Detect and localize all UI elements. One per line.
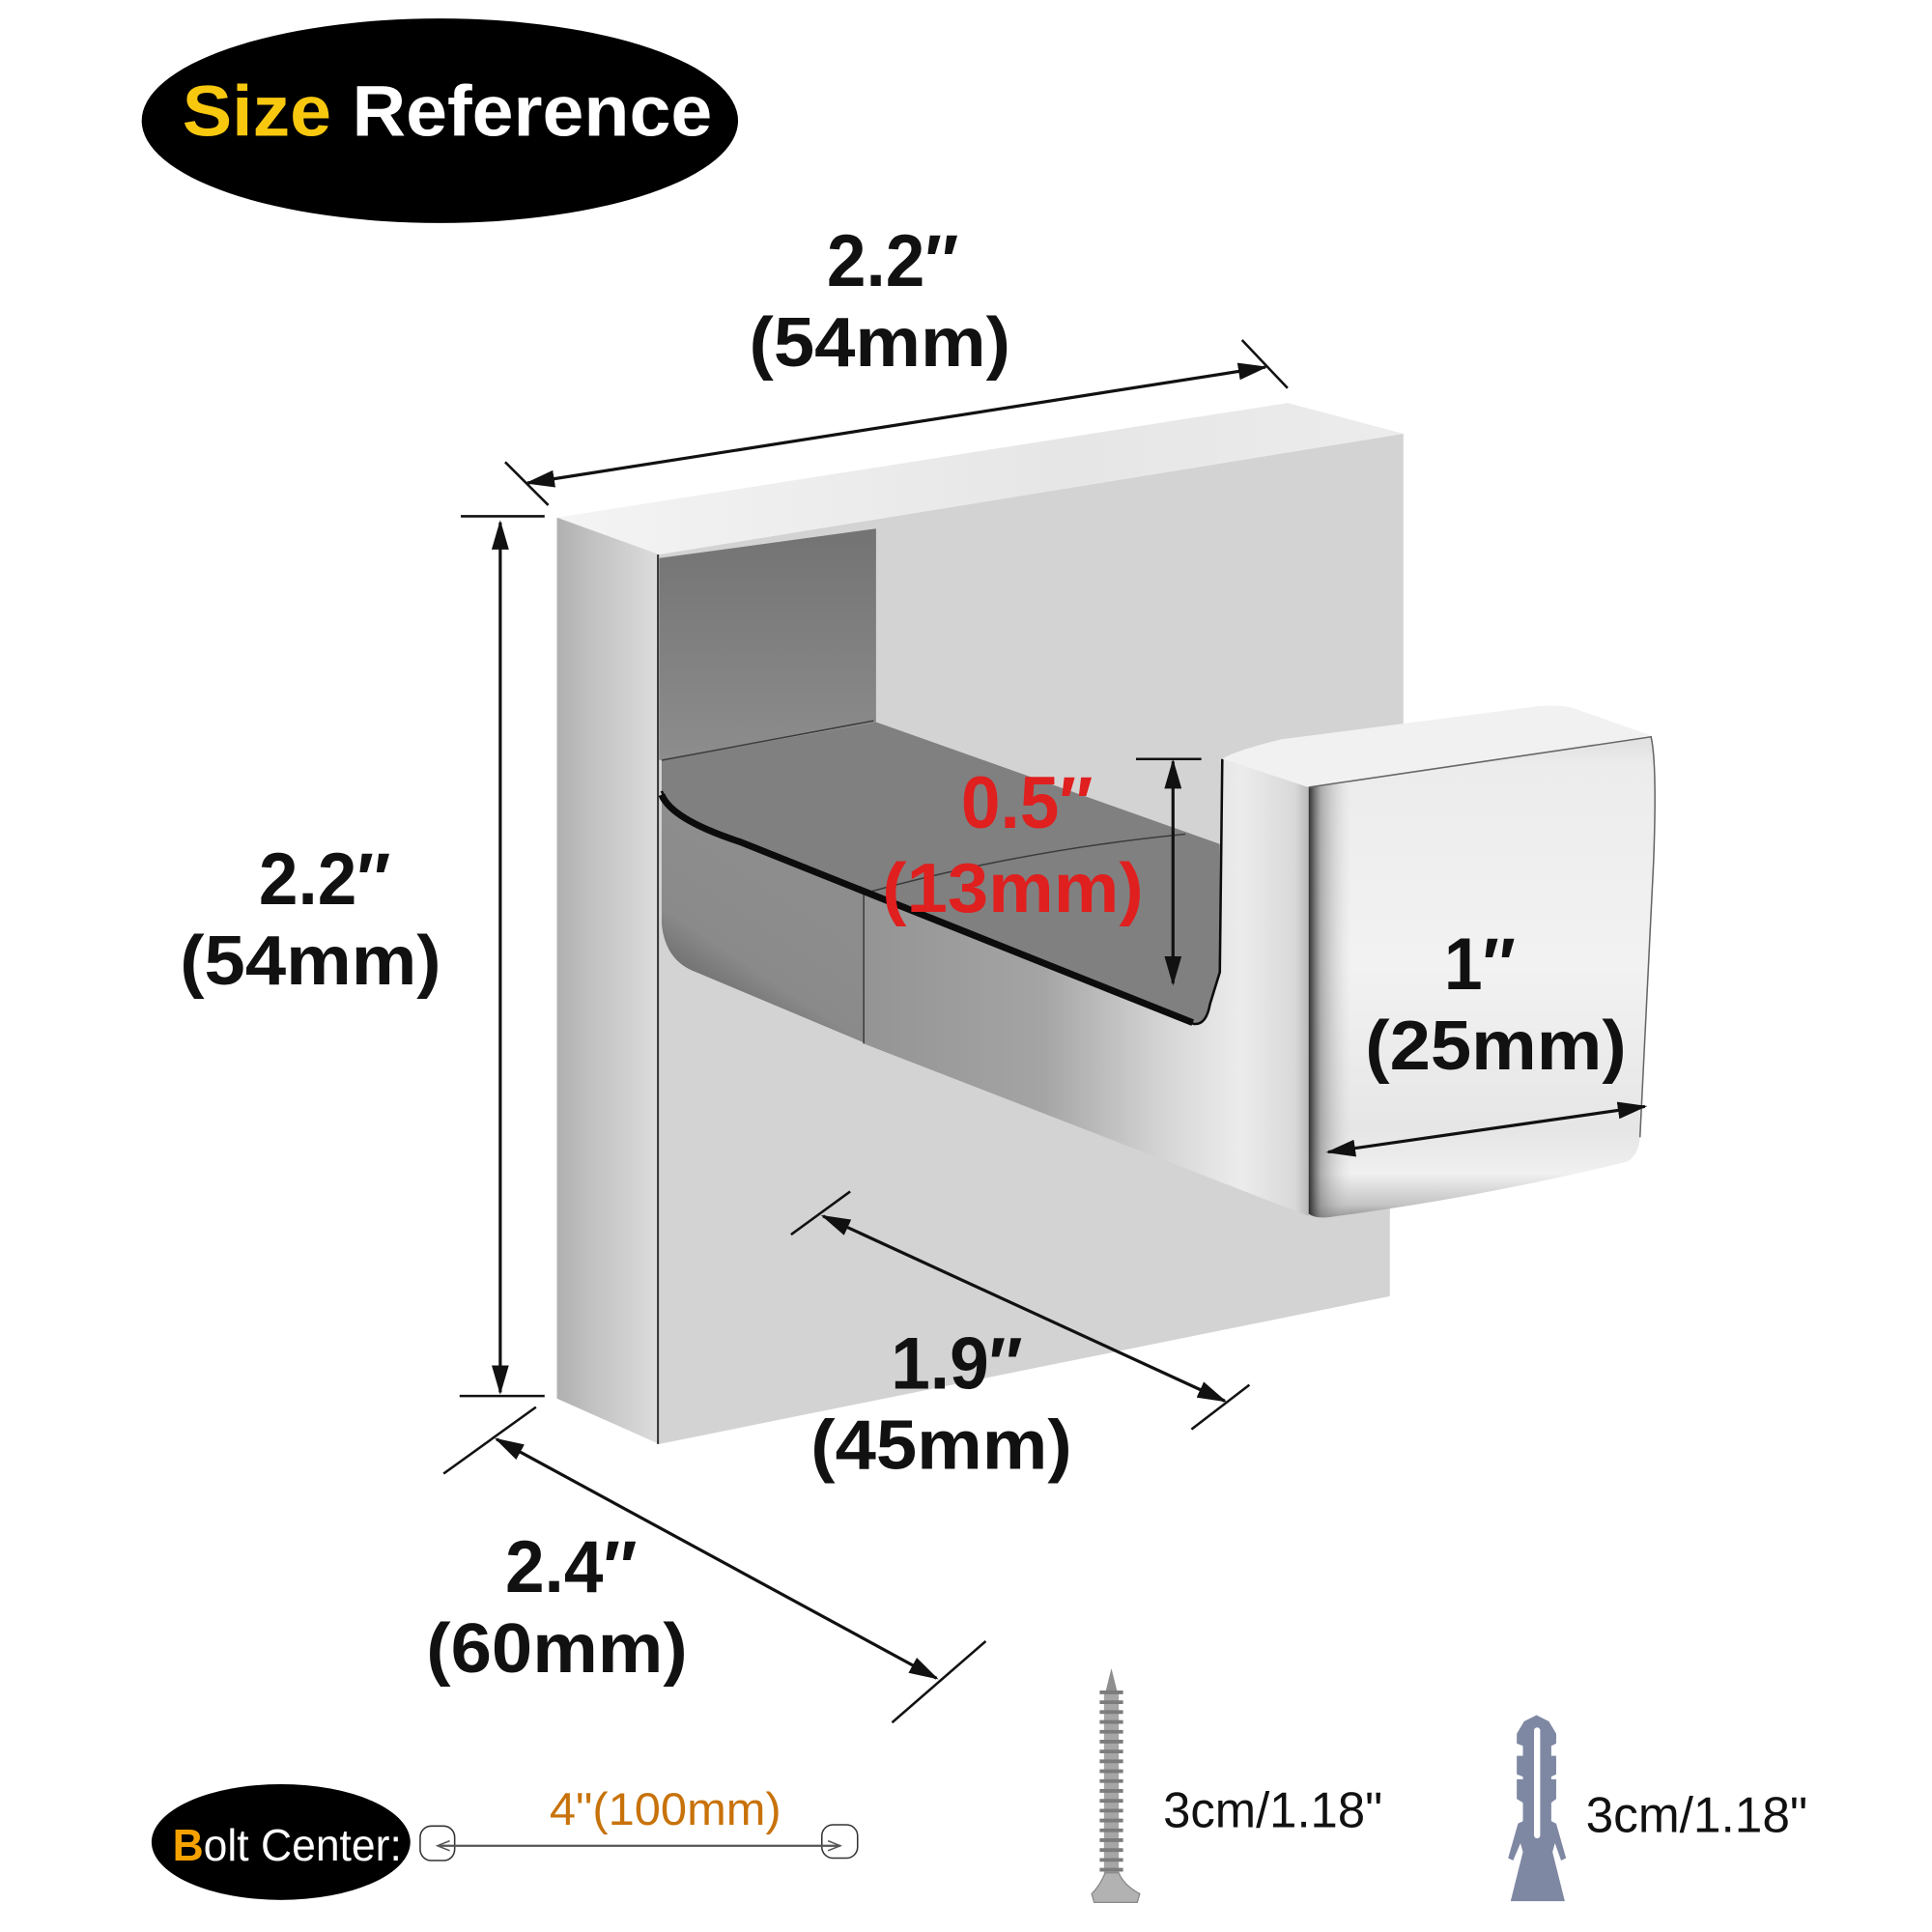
dimension: top width	[505, 220, 1288, 505]
dimension: head width: (25mm)	[1365, 1007, 1627, 1085]
dimension: head width: 1″	[1444, 923, 1516, 1006]
plate top face	[557, 403, 1404, 554]
dimension: top width: 2.2″	[827, 220, 958, 302]
bolt center measurement	[420, 1784, 858, 1861]
arm seams	[662, 721, 1185, 1043]
dimension: height	[180, 516, 545, 1396]
dimension: arm length: (45mm)	[810, 1406, 1072, 1484]
dimension: depth	[426, 1407, 985, 1722]
screw length: 3cm/1.18"	[1163, 1783, 1382, 1839]
dimension: arm length: 1.9″	[891, 1322, 1023, 1405]
hook head top	[1222, 705, 1651, 787]
plate left edge line	[657, 554, 659, 1444]
bolt center label: Bolt Center:	[173, 1820, 402, 1870]
title badge	[142, 18, 738, 223]
hook arm right side and neck	[864, 759, 1309, 1216]
hook head front	[1308, 738, 1654, 1217]
plate front face	[659, 434, 1404, 1444]
thick arm black edge	[662, 795, 1193, 1023]
dimension: depth: (60mm)	[426, 1609, 688, 1688]
product: towel hook	[557, 403, 1665, 1444]
icon: screw	[1092, 1668, 1140, 1902]
dimension: height: 2.2″	[259, 838, 390, 921]
dimension: head width	[1328, 923, 1645, 1152]
title text: Size Reference	[183, 71, 712, 151]
hook arm top surface	[662, 722, 1220, 1023]
dimension: hook gap	[882, 759, 1202, 983]
dimension: top width: (54mm)	[750, 303, 1010, 382]
dimension: height: (54mm)	[180, 922, 441, 1000]
hook arm left side	[662, 797, 867, 1043]
plate left edge	[557, 518, 659, 1444]
dimension: arm length	[791, 1191, 1249, 1484]
hook head outline	[1309, 737, 1655, 1137]
plate shaded recess	[659, 528, 876, 760]
bolt center badge	[152, 1784, 411, 1900]
anchor length: 3cm/1.18"	[1586, 1788, 1807, 1844]
arm reflection edge	[662, 759, 1222, 1024]
dimension: hook gap: 0.5″	[961, 762, 1093, 844]
dimension: hook gap: (13mm)	[882, 849, 1144, 927]
bolt center value: 4"(100mm)	[550, 1784, 781, 1835]
dimension: depth: 2.4″	[505, 1526, 637, 1608]
icon: wall anchor	[1508, 1716, 1566, 1901]
